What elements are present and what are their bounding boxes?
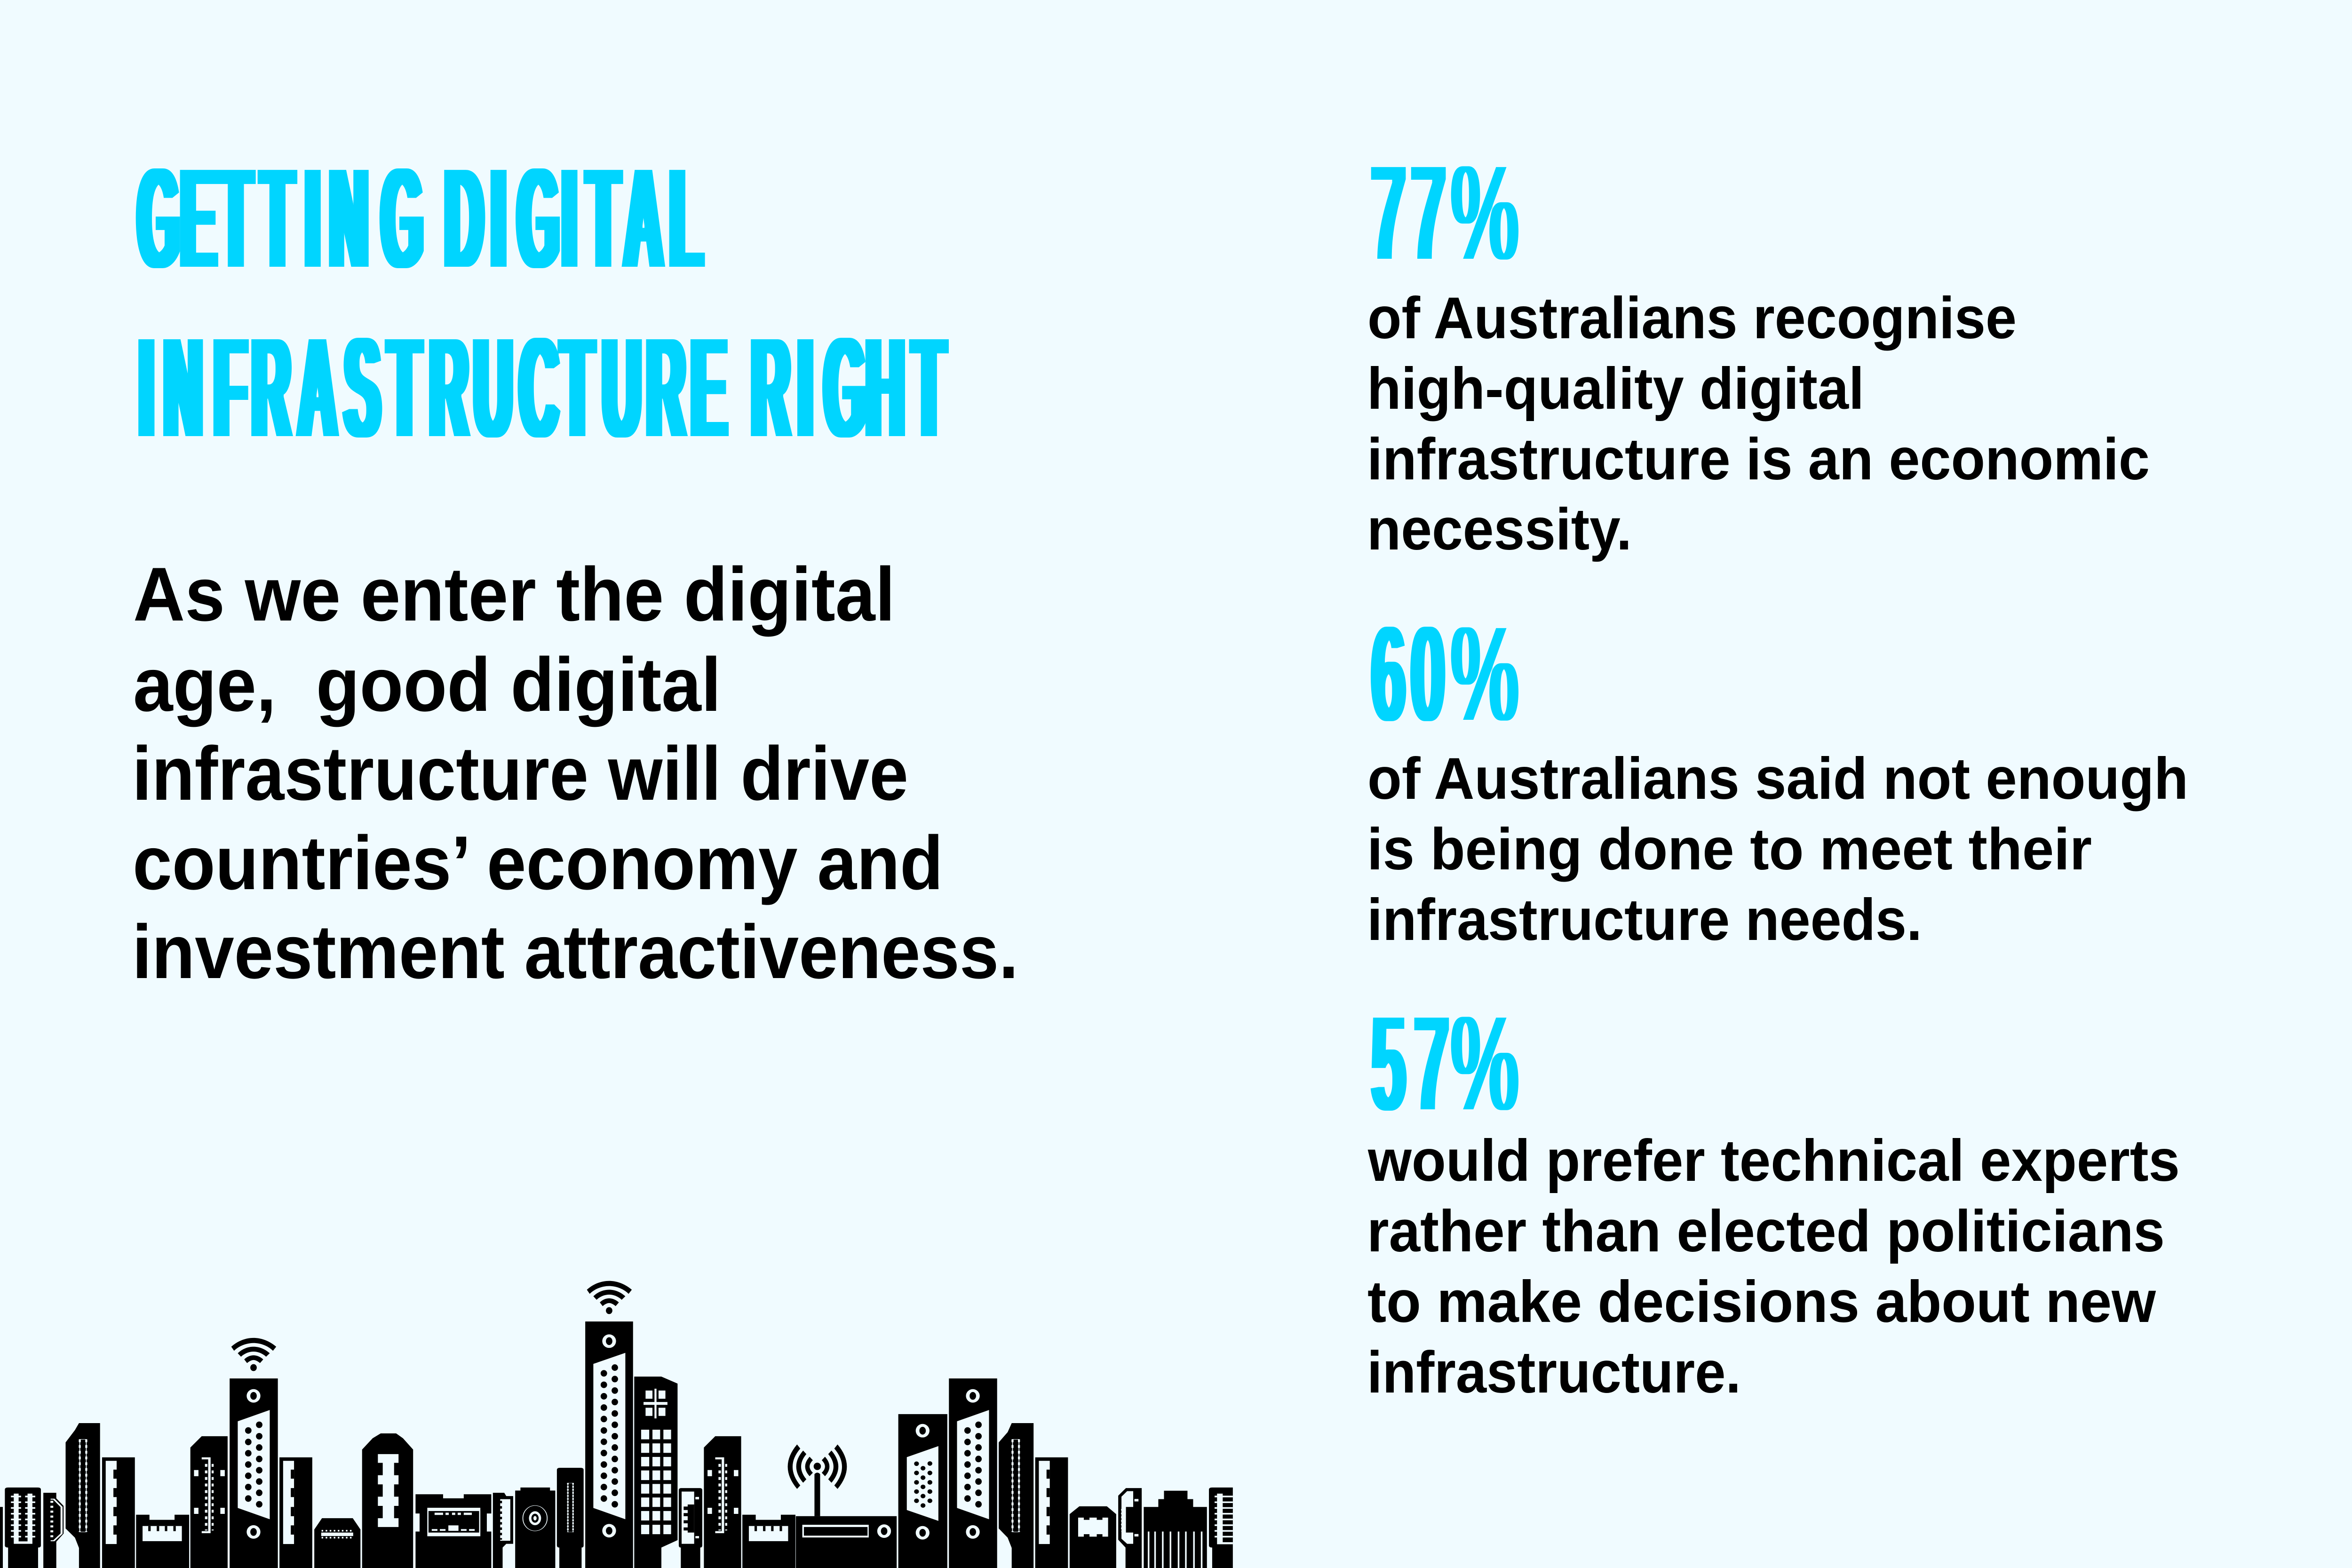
stat: 60%: 60	[1371, 597, 1445, 750]
building: side socket	[493, 1493, 513, 1568]
stat: 77%: %	[1451, 136, 1518, 289]
intro paragraph: infrastructure will drive	[132, 731, 908, 816]
intro paragraph: age, good digital	[133, 642, 721, 727]
stat text: 57%: would prefer technical experts	[1367, 1128, 2180, 1194]
building: dvi connector	[191, 1436, 228, 1568]
title	[138, 138, 945, 468]
building: ethernet plug	[1144, 1491, 1207, 1568]
stat: 60%: %	[1451, 597, 1518, 750]
title line 2: INFRASTRUCTURE RIGHT	[139, 307, 945, 468]
building: coaxial connector	[515, 1488, 555, 1568]
building: scart connector, cropped	[1209, 1488, 1233, 1568]
skyline left half	[0, 1281, 633, 1568]
stat text: 60%	[1367, 746, 2188, 953]
building: small socket	[1070, 1506, 1116, 1568]
stat text: 77%	[1367, 286, 2150, 562]
intro paragraph	[132, 552, 1018, 995]
stat: 60%	[1371, 597, 1518, 750]
stat text: 77%: infrastructure is an economic	[1367, 427, 2150, 492]
building: scart connector	[5, 1488, 41, 1568]
building: slab connector	[102, 1457, 135, 1568]
building: rounded slot connector	[557, 1468, 584, 1568]
stat: 57%: %	[1451, 987, 1518, 1140]
stat: 57%: 57	[1371, 987, 1449, 1140]
building: tallest tower with wifi	[585, 1281, 633, 1568]
building: dvi connector	[704, 1436, 741, 1568]
stat text: 77%: necessity.	[1367, 497, 1632, 562]
stat text: 60%: infrastructure needs.	[1367, 887, 1922, 953]
building: narrow slot connector	[999, 1423, 1033, 1568]
building: slab connector	[279, 1457, 312, 1568]
intro paragraph: countries’ economy and	[133, 820, 943, 906]
statistic numbers	[1371, 136, 1518, 1140]
building: narrow slot connector	[65, 1423, 100, 1568]
skyline of connector buildings	[0, 1281, 1233, 1568]
title line 1: GETTING DIGITAL	[138, 138, 702, 298]
stat text: 77%: of Australians recognise	[1367, 286, 2017, 351]
stat: 77%	[1371, 136, 1518, 289]
building: slab connector	[1035, 1457, 1068, 1568]
stat text: 57%: rather than elected politicians	[1367, 1199, 2165, 1264]
stat text: 60%: is being done to meet their	[1367, 817, 2092, 882]
stat text: 60%: of Australians said not enough	[1367, 746, 2188, 812]
stat: 77%: 77	[1371, 136, 1446, 289]
building: small socket	[314, 1518, 360, 1568]
skyline right half	[634, 1377, 1233, 1568]
building: tower	[949, 1378, 997, 1568]
building: hdmi connector	[43, 1493, 64, 1568]
building: tower with wifi	[230, 1338, 278, 1568]
stat text: 57%: to make decisions about new	[1367, 1269, 2156, 1335]
building: side socket	[1118, 1488, 1142, 1568]
building: domed connector	[362, 1433, 413, 1568]
building: usb socket	[679, 1488, 702, 1568]
building: network socket	[742, 1515, 795, 1568]
building: network socket	[136, 1515, 189, 1568]
stat text: 57%	[1367, 1128, 2180, 1405]
stat text: 77%: high-quality digital	[1367, 356, 1864, 422]
stat: 57%	[1371, 987, 1518, 1140]
building: vga tower	[898, 1414, 947, 1568]
intro paragraph: investment attractiveness.	[132, 909, 1018, 995]
building: wide panel	[415, 1494, 491, 1568]
intro paragraph: As we enter the digital	[133, 552, 895, 637]
building: router with antenna	[788, 1444, 897, 1568]
stat text: 57%: infrastructure.	[1367, 1340, 1741, 1405]
building: office block	[634, 1377, 677, 1568]
